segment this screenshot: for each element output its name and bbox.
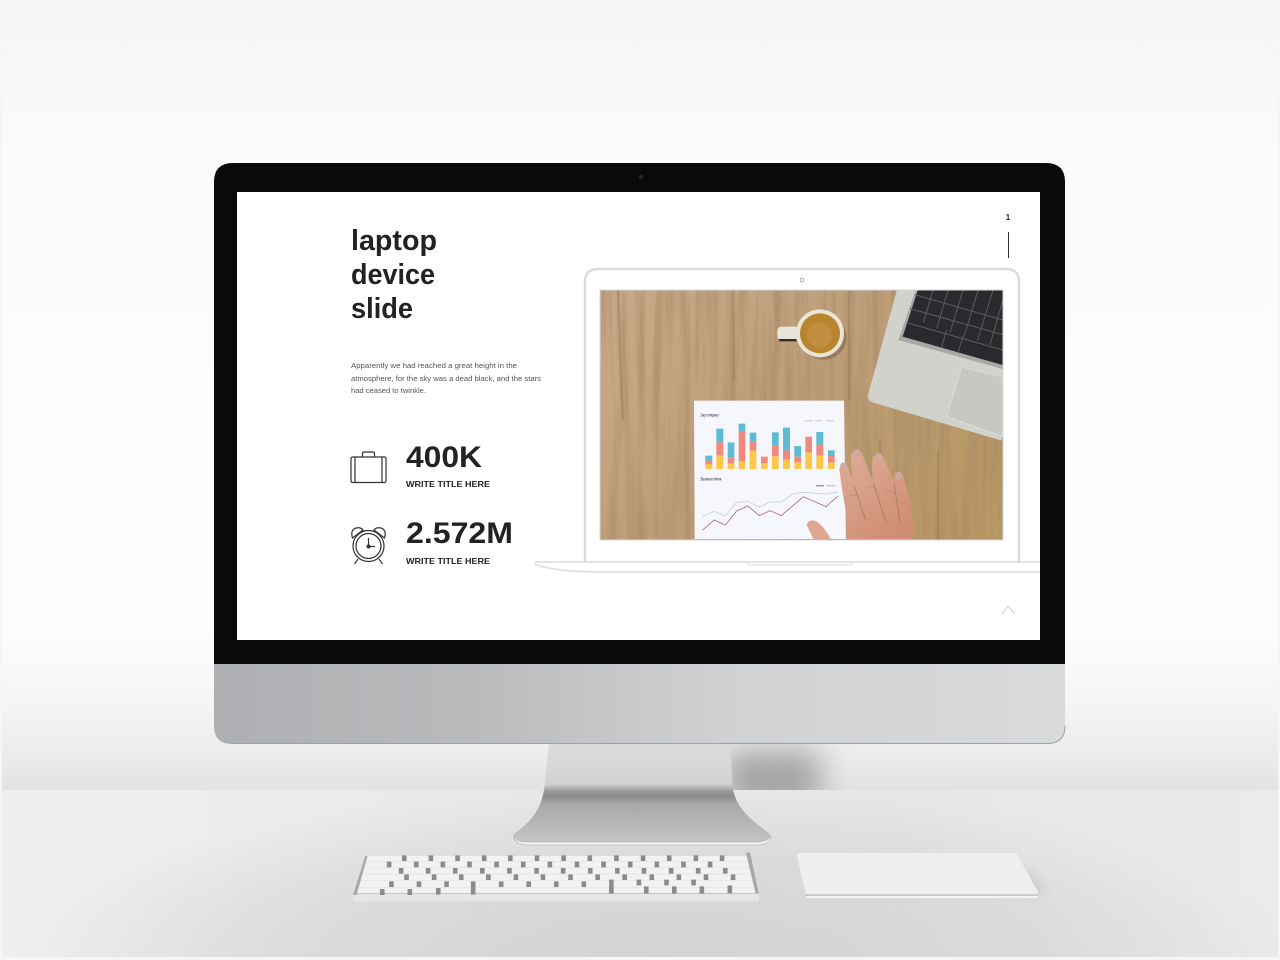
laptop notch [748, 562, 853, 565]
chart headings [701, 413, 722, 482]
slide title [351, 225, 437, 325]
stat: 2.572M: WRITE TITLE HERE [406, 557, 491, 566]
stat: 400K: WRITE TITLE HERE [406, 480, 491, 489]
body text: had ceased to twinkle. [351, 386, 426, 395]
body text [351, 361, 541, 395]
icon: briefcase [351, 452, 386, 482]
hand [839, 449, 914, 540]
laptop lid [585, 269, 1019, 562]
slide title: device [351, 259, 435, 291]
keyboard [353, 853, 759, 901]
slide title: slide [351, 293, 413, 325]
page number [1006, 213, 1011, 258]
wood dark seams [618, 290, 938, 540]
laptop outline [535, 269, 1045, 572]
printed chart paper [694, 401, 846, 539]
bar chart [705, 424, 835, 469]
wood background [600, 290, 1003, 540]
knuckles [848, 487, 911, 506]
monitor chin [214, 660, 1065, 744]
slide title: laptop [351, 225, 437, 257]
webcam [638, 174, 644, 180]
coffee cup [777, 309, 847, 360]
stat: 2.572M [406, 517, 513, 566]
monitor black bezel [214, 163, 1065, 664]
icon: alarm clock [352, 528, 385, 564]
desk surface [0, 790, 1280, 960]
stat: 2.572M: 2.572M [406, 517, 513, 550]
monitor body [214, 163, 1065, 744]
body text: atmosphere, for the sky was a dead black, and the stars [351, 374, 541, 383]
photo: desk with charts [600, 288, 1005, 540]
chart headings: Day company [701, 413, 719, 418]
stat: 400K [406, 441, 491, 489]
chart headings: Business Home [701, 477, 722, 482]
silver laptop in photo [868, 288, 1005, 441]
chart legends [804, 420, 835, 486]
laptop base [535, 562, 1045, 572]
keyboard row lines [356, 861, 757, 887]
body text: Apparently we had reached a great height in the [351, 361, 517, 370]
line chart [703, 492, 838, 530]
photo border [600, 290, 1003, 540]
laptop camera [800, 278, 804, 282]
thumb [807, 520, 831, 539]
trackpad [797, 853, 1046, 898]
nails [840, 449, 902, 479]
monitor stand [513, 744, 771, 845]
icon: up chevron [1002, 606, 1015, 614]
stat: 400K: 400K [406, 441, 482, 474]
keyboard key gaps [380, 856, 735, 895]
slide screen [237, 192, 1040, 640]
monitor shadow on wall [725, 750, 820, 810]
finger shadows [855, 483, 900, 522]
page number: 1 [1006, 213, 1011, 222]
wood grain [600, 290, 1003, 540]
